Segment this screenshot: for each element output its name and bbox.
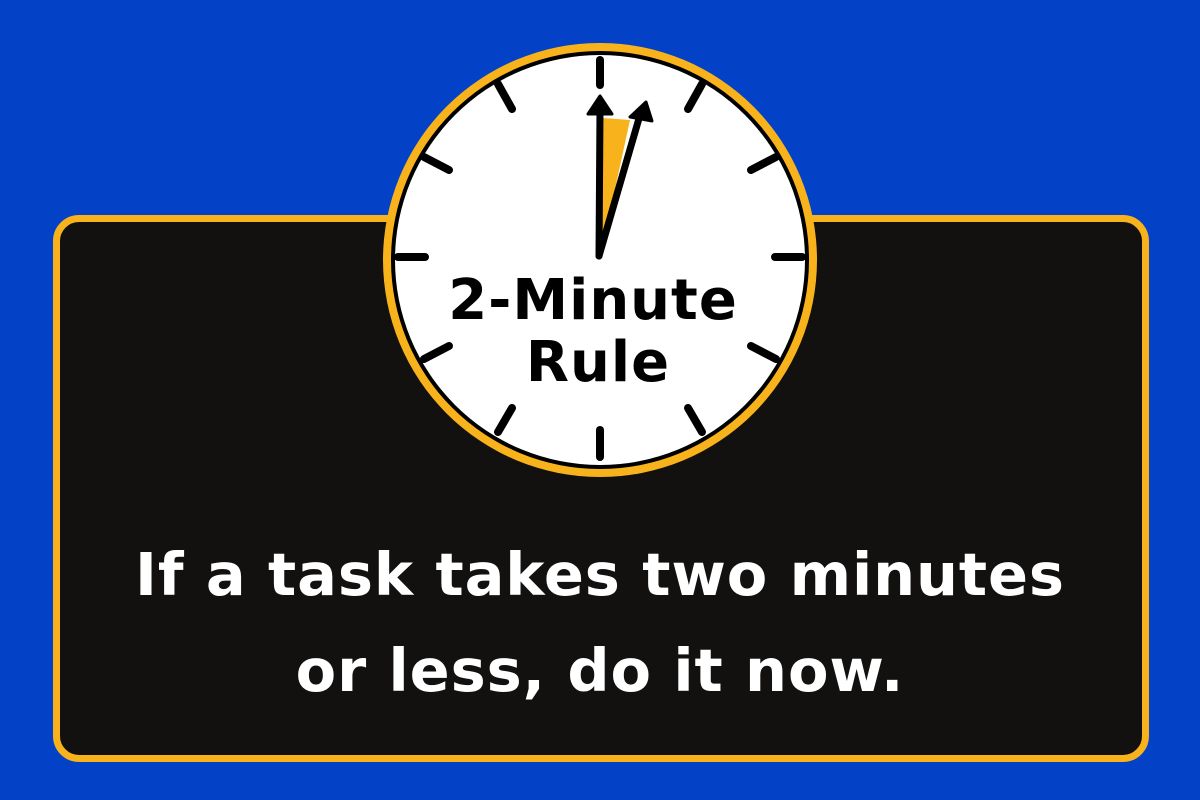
text block: rule statement: If a task takes two minutes <box>135 540 1065 609</box>
text block: rule statement: or less, do it now. <box>296 636 904 705</box>
panel: black card <box>53 215 1149 762</box>
icon: clock: Rule <box>526 330 670 395</box>
clock hands with orange wedge <box>588 96 652 258</box>
clock title text: 2-Minute <box>448 268 738 333</box>
text block: rule statement <box>135 540 1065 705</box>
